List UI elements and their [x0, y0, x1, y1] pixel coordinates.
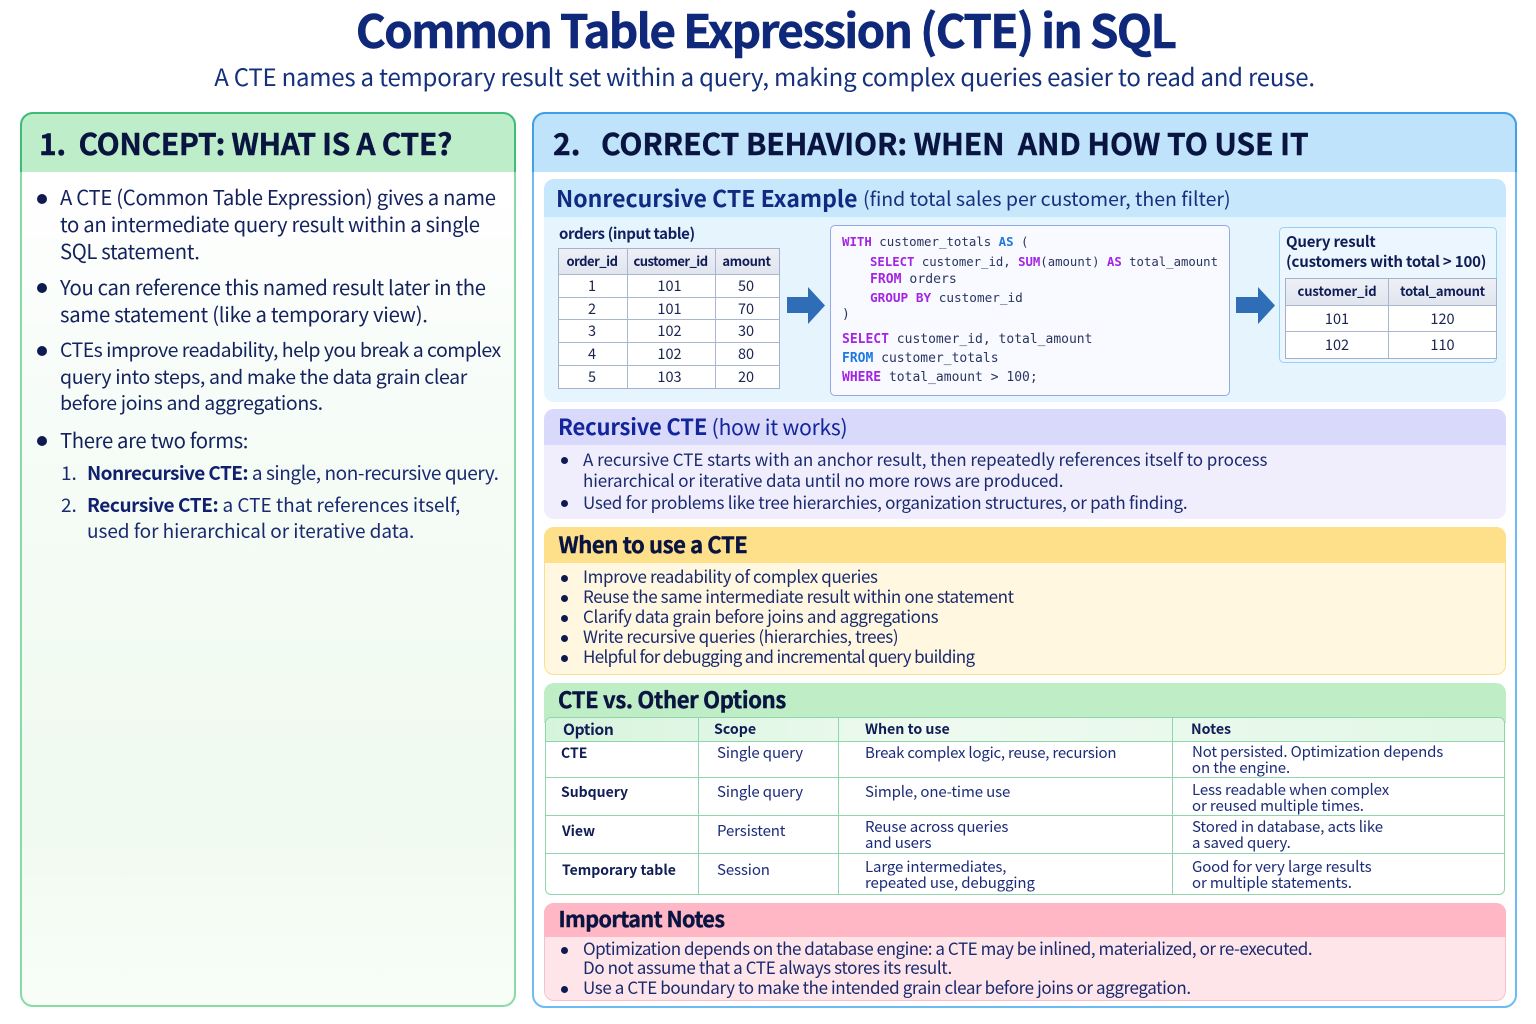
recursive bullets: [561, 446, 1267, 514]
notes bullets: Use a CTE boundary to make the intended grain clear before joins or aggregation.: [583, 974, 1191, 999]
concept text block: Recursive CTE: a CTE that references itself,: [87, 491, 460, 518]
table: orders: 102: [657, 343, 682, 364]
table: result: customer_id: [1298, 281, 1376, 300]
section: important notes: [544, 903, 1506, 1001]
table: orders: 80: [738, 343, 754, 364]
when heading: When to use a CTE: [558, 528, 747, 560]
table: orders: customer_id: [633, 251, 708, 270]
when bullets: Reuse the same intermediate result within one statement: [583, 583, 1014, 608]
table: orders: 101: [657, 275, 682, 296]
concept text block: to an intermediate query result within a single: [60, 208, 480, 238]
notes bullets: Do not assume that a CTE always stores its result.: [583, 954, 952, 979]
table: options: Good for very large results: [1192, 856, 1372, 877]
when bullets: [561, 563, 1014, 668]
table: orders: 30: [738, 320, 754, 341]
table: options: repeated use, debugging: [865, 872, 1035, 893]
when heading: [544, 526, 1506, 562]
concept text block: CTEs improve readability, help you break a complex: [60, 334, 501, 363]
table: orders: 103: [657, 366, 682, 387]
code: CTE query: ): [842, 307, 850, 322]
table: orders: 3: [588, 320, 596, 341]
heading: correct behavior: 2.: [553, 120, 580, 164]
table: options: Stored in database, acts like: [1192, 816, 1383, 837]
table: options: Temporary table: [562, 860, 676, 880]
heading: correct behavior: CORRECT BEHAVIOR: WHEN AND HOW TO USE IT: [601, 120, 1309, 164]
table: options: Reuse across queries: [865, 816, 1008, 837]
options heading: [544, 683, 1506, 723]
table: orders: order_id: [567, 251, 617, 270]
concept text block: [37, 181, 501, 544]
table: result: 101: [1325, 308, 1349, 329]
concept text block: query into steps, and make the data grain clear: [60, 361, 467, 390]
notes heading: Important Notes: [558, 902, 724, 934]
table: orders: 1: [588, 275, 596, 296]
heading: concept: [20, 112, 516, 172]
arrow: table to query: [787, 287, 825, 324]
table: orders: 2: [588, 298, 596, 319]
table: options: on the engine.: [1192, 757, 1290, 778]
table: orders: 5: [588, 366, 596, 387]
table: orders: [558, 248, 780, 389]
section: CTE vs other options: [544, 683, 1506, 895]
when bullets: Write recursive queries (hierarchies, trees): [583, 623, 898, 648]
section: when to use: [544, 527, 1506, 675]
panel: query result: (customers with total > 100): [1286, 251, 1486, 272]
table: options: Session: [717, 859, 770, 880]
table: options: CTE: [561, 743, 587, 763]
table: orders: 20: [738, 366, 754, 387]
table: options: Less readable when complex: [1192, 779, 1389, 800]
table: options: and users: [865, 832, 931, 853]
section heading: Nonrecursive CTE Example: [556, 180, 858, 214]
table: options: or reused multiple times.: [1192, 795, 1364, 816]
table: options: [545, 717, 1505, 895]
panel: correct behavior: [532, 112, 1517, 1008]
heading: concept: 1. CONCEPT: WHAT IS A CTE?: [39, 120, 452, 164]
concept text block: used for hierarchical or iterative data.: [87, 517, 414, 544]
table: options: Not persisted. Optimization depends: [1192, 741, 1443, 762]
code: CTE query: FROM orders: [870, 272, 957, 287]
recursive heading: Recursive CTE (how it works): [558, 410, 847, 442]
table: options: Break complex logic, reuse, recursion: [865, 742, 1116, 763]
table: result: [1285, 278, 1497, 359]
options heading: CTE vs. Other Options: [558, 683, 786, 715]
table: orders: 50: [738, 275, 754, 296]
concept text block: 2.: [61, 491, 77, 518]
code: CTE query: WITH customer_totals AS (: [842, 234, 1029, 249]
section heading: (find total sales per customer, then filter): [863, 183, 1231, 212]
concept text block: You can reference this named result later in the: [60, 271, 486, 301]
section heading: [544, 179, 1506, 217]
table: orders: 101: [657, 298, 682, 319]
when bullets: Improve readability of complex queries: [583, 563, 878, 588]
notes heading: [544, 902, 1506, 936]
table: orders: 4: [588, 343, 596, 364]
table: result: 120: [1430, 308, 1455, 329]
table: result: 102: [1325, 334, 1349, 355]
notes bullets: Optimization depends on the database engine: a CTE may be inlined, materialized, or re-executed.: [583, 935, 1312, 960]
section: recursive CTE: [544, 409, 1506, 519]
subtitle: A CTE names a temporary result set within a query, making complex queries easier to read and reuse.: [214, 58, 1315, 92]
table: options: Notes: [1191, 719, 1231, 739]
recursive bullets: hierarchical or iterative data until no more rows are produced.: [583, 467, 1063, 492]
concept text block: 1.: [61, 459, 77, 486]
panel: query result: Query result: [1286, 231, 1376, 252]
table: options: Large intermediates,: [865, 856, 1006, 877]
label: orders: orders (input table): [559, 223, 695, 244]
when bullets: Clarify data grain before joins and aggregations: [583, 603, 938, 628]
code: CTE query: WHERE total_amount > 100;: [842, 370, 1038, 385]
heading: correct behavior: [532, 112, 1517, 172]
table: result: 110: [1430, 334, 1455, 355]
table: options: a saved query.: [1192, 832, 1291, 853]
concept text block: before joins and aggregations.: [60, 387, 323, 416]
table: orders: 70: [738, 298, 754, 319]
code: CTE query: FROM customer_totals: [842, 351, 999, 366]
concept text block: There are two forms:: [60, 424, 248, 454]
table: orders: 102: [657, 320, 682, 341]
table: options: Persistent: [717, 820, 785, 841]
code: CTE query: SELECT customer_id, total_amount: [842, 332, 1092, 347]
arrow: query to result: [1236, 287, 1275, 324]
code: CTE query: SELECT customer_id, SUM(amount) AS total_amount: [870, 255, 1218, 269]
panel: concept: [20, 112, 516, 1007]
concept text block: Nonrecursive CTE: a single, non-recursive query.: [87, 459, 499, 486]
table: options: Single query: [717, 742, 803, 763]
table: options: Single query: [717, 781, 803, 802]
recursive bullets: Used for problems like tree hierarchies, organization structures, or path finding.: [583, 489, 1187, 514]
table: result: total_amount: [1400, 281, 1485, 300]
table: options: Subquery: [561, 782, 628, 802]
panel: query result: [1279, 227, 1497, 363]
concept text block: SQL statement.: [60, 235, 200, 265]
notes bullets: [561, 935, 1312, 999]
section: nonrecursive example: [544, 179, 1506, 402]
table: options: Simple, one-time use: [865, 781, 1010, 802]
recursive bullets: A recursive CTE starts with an anchor result, then repeatedly references itself to process: [583, 446, 1267, 471]
table: options: When to use: [865, 719, 950, 739]
code: CTE query: GROUP BY customer_id: [870, 290, 1023, 305]
table: options: Scope: [714, 719, 756, 739]
table: options: Option: [563, 718, 614, 740]
code: CTE query: [830, 225, 1230, 396]
table: options: or multiple statements.: [1192, 872, 1352, 893]
table: orders: amount: [722, 251, 771, 270]
recursive heading: [544, 409, 1506, 445]
concept text block: A CTE (Common Table Expression) gives a name: [60, 181, 496, 211]
table: options: View: [562, 821, 595, 841]
when bullets: Helpful for debugging and incremental query building: [583, 643, 974, 668]
concept text block: same statement (like a temporary view).: [60, 298, 428, 328]
